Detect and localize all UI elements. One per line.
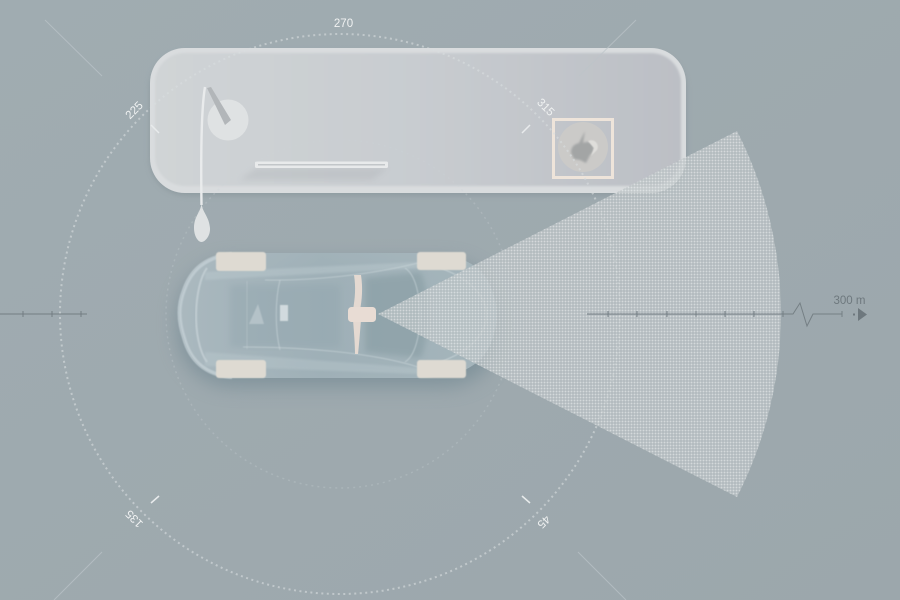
car shadow xyxy=(178,262,500,386)
rear left wheel xyxy=(216,252,266,271)
distance scale xyxy=(587,295,867,326)
seat highlight xyxy=(249,304,288,324)
label 135: 135 xyxy=(124,507,146,529)
bearing labels xyxy=(124,18,556,530)
dashboard sensor cross xyxy=(348,275,376,354)
label 270: 270 xyxy=(334,18,353,30)
radar dotted ring outer xyxy=(60,34,620,594)
distance label: 300 m xyxy=(834,295,865,307)
radar dashed ring inner xyxy=(166,140,514,488)
sensor cone xyxy=(378,131,781,497)
label 315: 315 xyxy=(534,97,556,119)
bearing ticks xyxy=(151,125,530,503)
lamp base disc xyxy=(208,100,248,140)
lamp cable and head xyxy=(194,87,210,242)
diagonal guide lines xyxy=(45,20,636,600)
cabin shading xyxy=(230,285,340,347)
rear window and outline xyxy=(180,254,232,377)
lamp arm xyxy=(207,87,231,125)
animal tracking box xyxy=(554,120,612,178)
pedestrian shadow xyxy=(240,168,388,180)
rear right wheel xyxy=(216,360,266,378)
front right wheel xyxy=(417,360,466,378)
left range scale xyxy=(0,311,87,317)
car xyxy=(180,252,497,378)
horizontal bar xyxy=(255,162,388,168)
arrow xyxy=(853,308,867,321)
label 225: 225 xyxy=(124,100,146,122)
body lines xyxy=(243,263,486,367)
label 45: 45 xyxy=(535,513,552,530)
car body xyxy=(180,253,497,378)
front left wheel xyxy=(417,252,466,270)
mirror panel xyxy=(150,48,686,242)
